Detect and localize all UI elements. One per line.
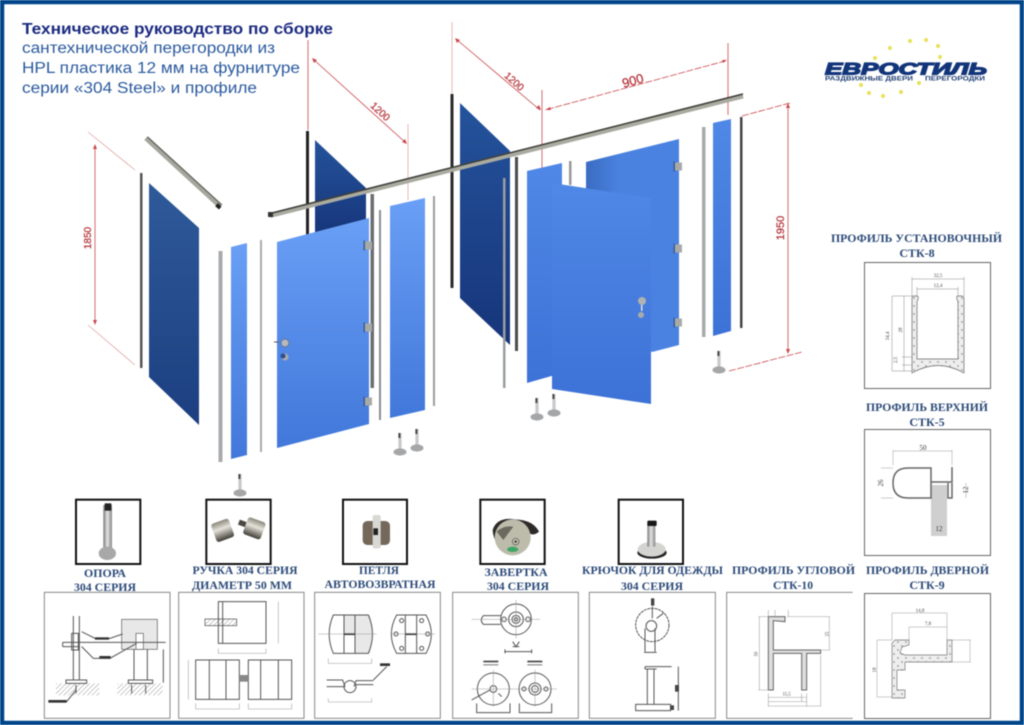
label: 304 СЕРИЯ <box>74 580 136 594</box>
dimension labels: 28 <box>899 327 904 332</box>
drawing box <box>864 262 990 388</box>
dimension lines <box>877 613 971 697</box>
label: ПЕТЛЯ <box>359 563 399 577</box>
photo: support <box>76 500 140 564</box>
heading <box>866 400 989 429</box>
drawing box: 25 <box>825 631 830 636</box>
centre strip panel <box>390 198 425 418</box>
strip panel behind open door <box>527 163 562 383</box>
stub profile <box>569 161 572 185</box>
rear wide panel <box>586 139 679 352</box>
back post centre <box>306 131 309 235</box>
drawing box: 50 <box>755 651 760 656</box>
dimension labels: 32,5 <box>934 274 943 279</box>
logo tagline: РАЗДВИЖНЫЕ ДВЕРИ <box>825 76 913 82</box>
left strip post <box>218 251 222 462</box>
dimension 1950 <box>729 103 802 371</box>
label: РУЧКА 304 СЕРИЯ <box>192 563 298 577</box>
right post <box>740 117 742 328</box>
drawing box <box>453 592 578 718</box>
label: ДИАМЕТР 50 ММ <box>192 578 292 592</box>
dimension 1200 right: 1200 <box>502 71 526 94</box>
logo tagline <box>825 76 985 82</box>
support feet <box>234 351 726 497</box>
label: ЗАВЕРТКА <box>484 565 548 579</box>
heading: ПРОФИЛЬ ВЕРХНИЙ <box>866 400 989 414</box>
dimension lines <box>881 450 966 498</box>
profile section <box>912 296 964 373</box>
dimension labels: 12,4 <box>934 284 943 289</box>
heading <box>866 563 990 592</box>
drawing box <box>589 592 715 718</box>
heading: СТК-8 <box>899 246 935 260</box>
dimension 1850 <box>83 132 135 365</box>
label: 304 СЕРИЯ <box>487 579 549 593</box>
subtitle text: HPL пластика 12 мм на фурнитуре <box>22 60 300 77</box>
component: крючок <box>582 500 723 718</box>
left side post <box>140 173 142 368</box>
logo stars <box>859 38 942 98</box>
long top rail <box>268 94 743 217</box>
label <box>324 563 436 591</box>
drawing box: 15,5 <box>783 692 791 697</box>
dimension 1200 left <box>308 40 408 200</box>
right strip panel <box>713 119 731 336</box>
profile СТК-8 <box>831 231 1003 388</box>
heading: ПРОФИЛЬ ДВЕРНОЙ <box>866 563 990 577</box>
label <box>484 565 549 593</box>
drawing box <box>864 594 990 718</box>
profile СТК-9 <box>864 563 990 718</box>
door lock and handle <box>274 339 289 360</box>
dimension labels <box>886 274 943 363</box>
dimension labels: 2,5 <box>894 356 899 363</box>
right profile <box>702 127 706 337</box>
dimension labels: 34,4 <box>886 331 891 340</box>
subtitle text <box>22 40 300 97</box>
dimension labels: 26 <box>877 479 885 486</box>
dimension 900 <box>545 43 728 115</box>
drawing box <box>44 592 170 718</box>
profile section <box>893 467 952 498</box>
rear panel hinges <box>674 162 682 328</box>
back panel centre <box>315 140 366 236</box>
short top rail <box>146 137 222 209</box>
left strip panel <box>231 243 247 459</box>
dimension labels <box>873 609 932 672</box>
drawing box <box>727 592 853 718</box>
heading: СТК-9 <box>909 578 945 592</box>
component: опора <box>44 500 170 718</box>
label: СТК-10 <box>773 578 813 592</box>
subtitle text: серии «304 Steel» и профиле <box>22 80 257 97</box>
logo wordmark: ЕВРОСТИЛЬ <box>825 60 987 78</box>
heading <box>831 231 1003 260</box>
dimension labels: 14,8 <box>916 609 925 614</box>
dimension labels: 12 <box>936 525 943 533</box>
dimension labels: 12 <box>962 486 970 494</box>
thin profile right of door <box>379 210 381 420</box>
open door <box>552 183 651 404</box>
dimension labels <box>877 444 970 533</box>
dimension labels: 50 <box>920 444 927 452</box>
logo tagline: ПЕРЕГОРОДКИ <box>925 76 985 82</box>
profile СТК-5 <box>864 400 990 556</box>
dimension 900: 900 <box>620 70 645 91</box>
drawing box <box>315 592 440 718</box>
title block <box>22 21 333 97</box>
label: ПРОФИЛЬ УГЛОВОЙ <box>732 563 856 577</box>
thin profile right section <box>503 178 506 388</box>
left side panel <box>149 183 199 425</box>
component: петля <box>315 500 440 718</box>
profile right of centre strip <box>433 196 435 406</box>
glass panel <box>931 485 947 536</box>
dimension 1200 right <box>452 22 542 168</box>
centre door post <box>370 194 374 388</box>
dimension 1200 left: 1200 <box>368 101 392 124</box>
label <box>192 563 298 592</box>
back panel right <box>460 103 510 345</box>
photo: hinge <box>343 500 407 564</box>
label: КРЮЧОК ДЛЯ ОДЕЖДЫ <box>582 563 723 577</box>
drawing box <box>864 430 990 556</box>
label: 304 СЕРИЯ <box>621 579 683 593</box>
logo: Евростиль <box>825 38 987 98</box>
dimension 1950: 1950 <box>775 216 787 240</box>
heading: Техническое руководство по сборке <box>22 21 333 38</box>
front door closed <box>277 218 369 448</box>
drawing box <box>179 592 304 718</box>
dimension labels: 7,8 <box>925 622 932 627</box>
label <box>582 563 723 593</box>
exploded assembly diagram <box>83 22 802 497</box>
component: профиль угловой СТК-10 <box>727 563 856 718</box>
component: ручка <box>179 500 304 718</box>
dimension 1850: 1850 <box>83 226 94 249</box>
thin profile left of door <box>260 240 262 452</box>
subtitle text: сантехнической перегородки из <box>22 40 275 57</box>
dimension labels: 18 <box>873 667 878 672</box>
door hinges <box>364 240 372 406</box>
label: АВТОВОЗВРАТНАЯ <box>324 577 436 591</box>
post right section <box>515 157 518 351</box>
photo: hook <box>619 500 683 564</box>
label: ОПОРА <box>84 566 126 580</box>
back post right <box>450 94 454 288</box>
profile section <box>892 640 952 698</box>
heading: ПРОФИЛЬ УСТАНОВОЧНЫЙ <box>831 231 1003 245</box>
label <box>732 563 856 592</box>
dimensions <box>892 277 964 371</box>
label <box>74 566 136 594</box>
photo: latch <box>480 500 545 564</box>
component: завертка <box>453 500 578 718</box>
heading: СТК-5 <box>909 415 945 429</box>
open door hardware <box>638 297 646 318</box>
photo: handle <box>206 500 271 564</box>
